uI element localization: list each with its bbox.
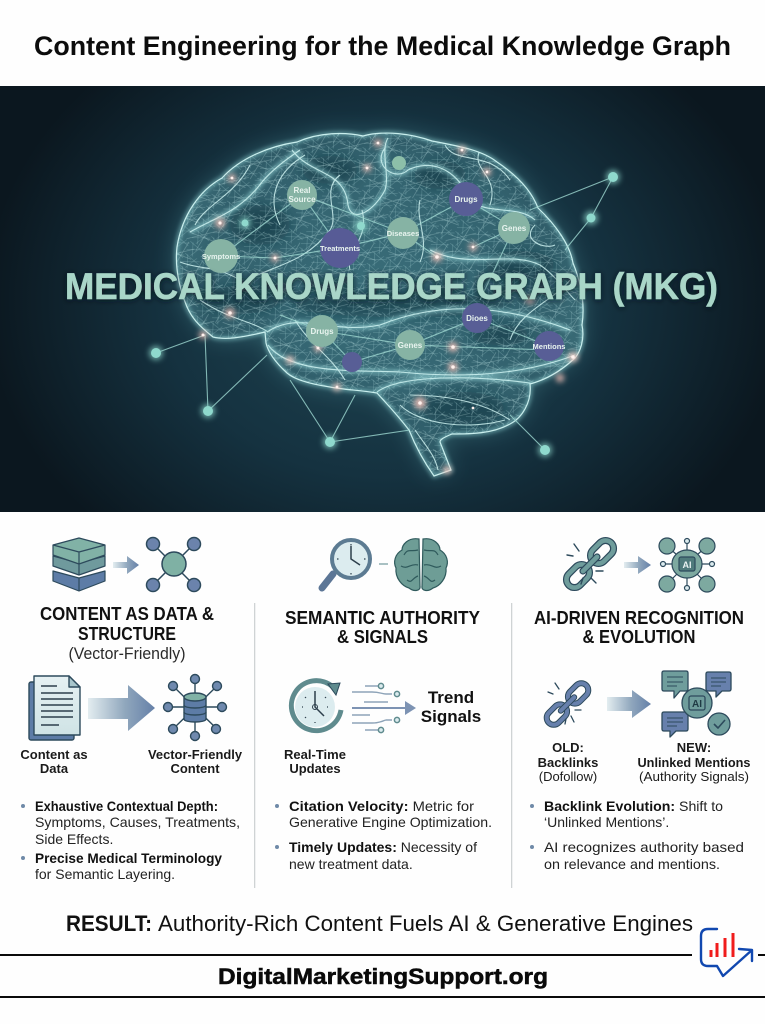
bullets: Timely Updates: Necessity of [289,839,477,855]
knowledge nodes: Mentions [533,342,565,351]
divider [254,603,255,888]
sublabel: old backlinks [538,740,598,784]
knowledge nodes: Source [288,195,316,204]
knowledge nodes: Diseases [387,229,419,238]
result statement: RESULT: [66,911,152,936]
sublabel: old backlinks: (Dofollow) [539,769,597,784]
bullets: for Semantic Layering. [35,866,175,882]
bullets: AI recognizes authority based [544,839,744,855]
sublabel: vector-friendly content [148,747,243,776]
icon: real-time clock [291,681,341,731]
network links [156,177,613,450]
arrow [113,556,139,574]
icon: document [29,676,80,740]
outer glowing nodes [149,170,620,457]
sublabel: new unlinked mentions: Unlinked Mentions [638,755,750,770]
brain illustration [170,130,590,480]
knowledge nodes [202,156,565,372]
arrow [624,556,651,574]
result statement: Authority-Rich Content Fuels AI & Generative Engines [158,911,693,936]
heading: & SIGNALS [337,627,428,647]
knowledge nodes: Real [294,186,310,195]
heading: AI-DRIVEN RECOGNITION [534,608,744,628]
bullets [530,798,744,872]
bullets: on relevance and mentions. [544,856,720,872]
knowledge nodes: Drugs [454,195,478,204]
knowledge nodes: Dioes [466,314,488,323]
divider [511,603,512,888]
icon: brain [395,539,447,590]
icon: trend signal lines [352,683,416,733]
sublabel: real-time updates: Real-Time [284,747,346,762]
bullets: Symptoms, Causes, Treatments, [35,814,240,830]
heading [534,608,744,647]
knowledge nodes: Genes [502,224,527,233]
bullets: Exhaustive Contextual Depth: [35,798,218,814]
column 1: content as data [20,538,243,882]
large arrow [88,685,155,731]
darker lobes [200,156,555,424]
heading: (Vector-Friendly) [68,645,186,663]
sublabel: old backlinks: Backlinks [538,755,598,770]
sublabel: content as data: Data [40,761,69,776]
glow sparks [199,139,578,474]
heading [285,608,480,647]
sublabel: content as data: Content as [20,747,88,762]
sublabel: new unlinked mentions: (Authority Signals) [639,769,749,784]
sublabel: new unlinked mentions [638,740,750,784]
sublabel: old backlinks: OLD: [552,740,584,755]
sublabel: real-time updates: Updates [289,761,341,776]
bullets: Precise Medical Terminology [35,850,222,866]
bullets: Side Effects. [35,831,113,847]
knowledge nodes: Drugs [310,327,334,336]
knowledge nodes: Genes [398,341,423,350]
icon label: AI: AI [682,560,692,570]
trend signals label [421,688,481,726]
heading: & EVOLUTION [582,627,696,647]
connector dash [379,563,388,565]
trend signals label: Signals [421,707,481,726]
icon label: AI: AI [692,699,702,710]
bright gyri glow [190,138,575,392]
trend signals label: Trend [428,688,474,707]
sublabel: content as data [20,747,88,776]
column 2: semantic authority [275,539,492,872]
bullets: new treatment data. [289,856,413,872]
icon: unlinked mentions [662,671,731,737]
knowledge nodes: Treatments [320,244,360,253]
bullets: Citation Velocity: Metric for [289,798,474,814]
icon: network hub [146,538,200,592]
hero panel: medical knowledge graph brain [0,86,765,512]
footer rules [0,955,765,997]
hero heading: MEDICAL KNOWLEDGE GRAPH (MKG) [65,265,718,307]
bullets: ‘Unlinked Mentions’. [544,814,669,830]
heading [40,604,214,663]
heading: SEMANTIC AUTHORITY [285,608,480,628]
title: Content Engineering for the Medical Knowledge Graph [34,31,731,61]
sublabel: vector-friendly content: Vector-Friendly [148,747,243,762]
icon: AI brain hub [659,538,715,592]
heading: STRUCTURE [78,624,176,644]
heading: CONTENT AS DATA & [40,604,214,624]
sublabel: real-time updates [284,747,346,776]
icon: blue broken chain [544,680,591,728]
bullets: Generative Engine Optimization. [289,814,492,830]
bullets: Backlink Evolution: Shift to [544,798,723,814]
icon: magnifier clock [322,540,370,588]
icon: server stack [53,538,105,591]
knowledge nodes: Symptoms [202,252,240,261]
bullets [21,798,240,882]
column 3: AI-driven recognition [530,537,750,872]
sublabel: new unlinked mentions: NEW: [677,740,711,755]
bullets [275,798,492,872]
icon: vector database [164,674,226,740]
sublabel: vector-friendly content: Content [170,761,220,776]
footer website: DigitalMarketingSupport.org [218,964,548,989]
icon: broken chain [563,537,617,591]
logo icon [701,929,752,976]
arrow [607,690,651,718]
